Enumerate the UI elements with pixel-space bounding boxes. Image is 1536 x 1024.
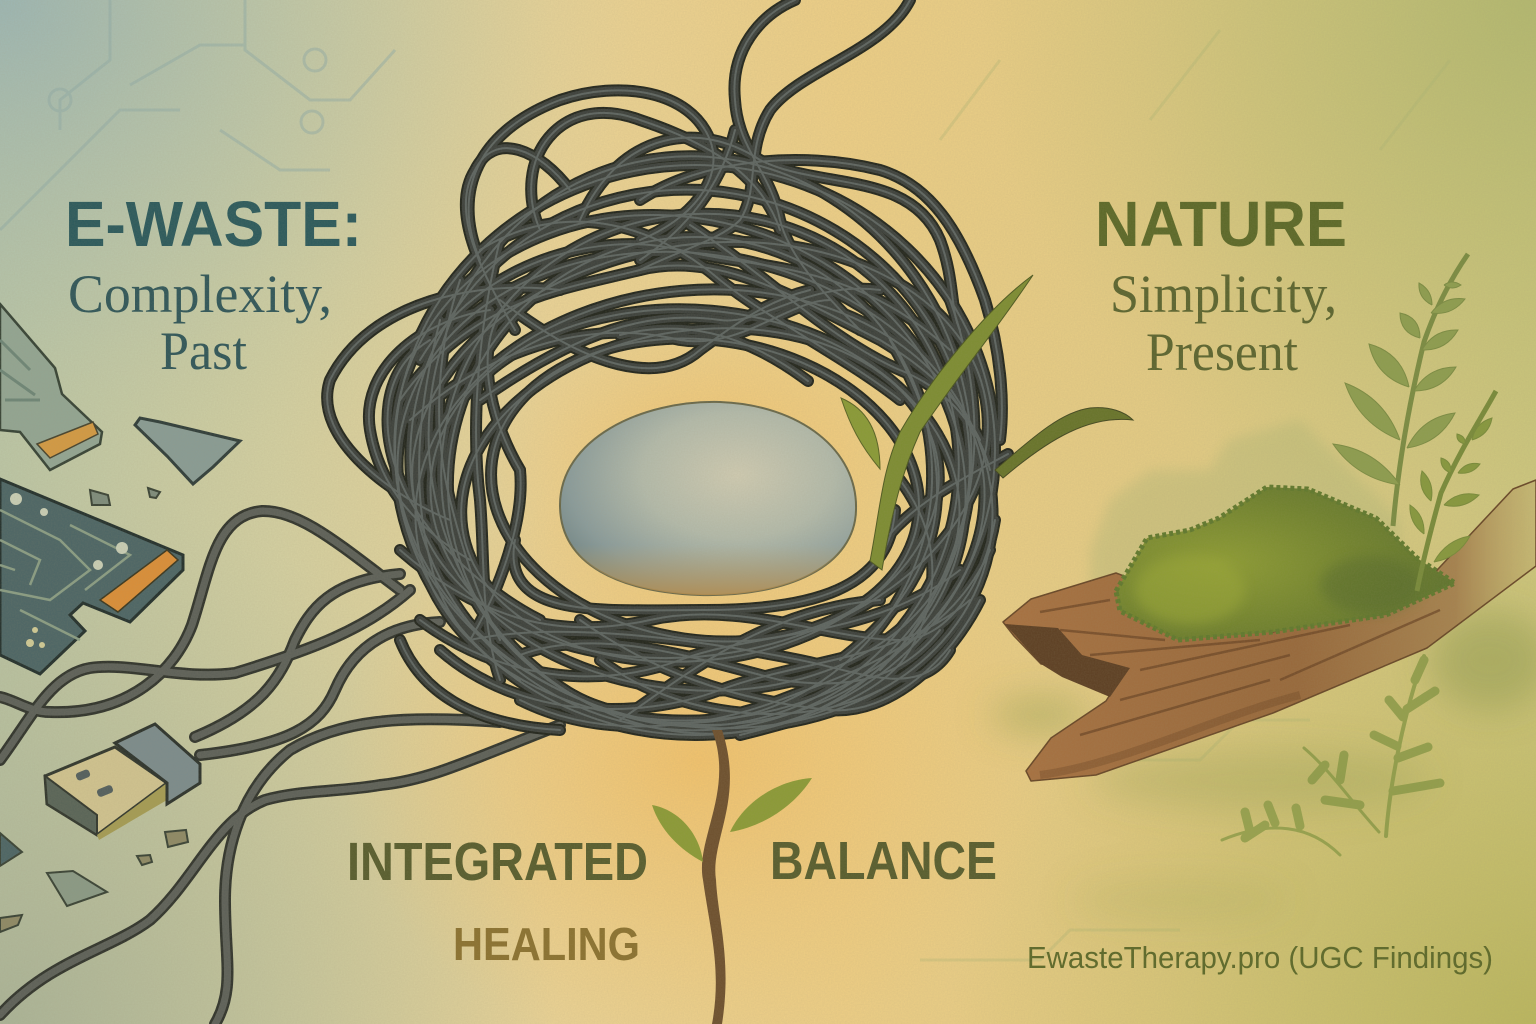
source credit: EwasteTherapy.pro (UGC Findings) xyxy=(1027,940,1493,975)
fern: upper right xyxy=(1410,391,1496,591)
ground grass xyxy=(990,610,1536,922)
moss xyxy=(1116,487,1455,640)
cables to nest xyxy=(0,511,560,1024)
heading: nature: Present xyxy=(1146,322,1298,382)
label: integrated: INTEGRATED xyxy=(347,832,648,892)
icon: usb plug xyxy=(45,724,200,840)
heading: nature xyxy=(1095,188,1347,382)
broken shard xyxy=(135,418,240,484)
small debris xyxy=(0,488,188,932)
driftwood log xyxy=(1003,480,1536,781)
fern: ground sprig xyxy=(1222,805,1340,855)
fern: upper left xyxy=(1333,254,1468,526)
circuit card fragment xyxy=(0,304,102,470)
fern: lower xyxy=(1304,656,1440,836)
panel: e-waste debris xyxy=(0,304,560,1024)
woven cable nest xyxy=(322,0,1053,822)
heading: e-waste: E-WASTE: xyxy=(65,188,362,260)
label: healing: HEALING xyxy=(453,918,640,970)
heading: nature: NATURE xyxy=(1095,188,1347,260)
panel: nature scene xyxy=(990,254,1536,922)
heading: nature: Simplicity, xyxy=(1110,264,1337,324)
label: balance: BALANCE xyxy=(770,831,997,891)
heading: e-waste: Past xyxy=(160,321,247,381)
background hills xyxy=(1090,420,1400,600)
sprout xyxy=(652,730,812,1024)
stone xyxy=(560,402,856,595)
heading: e-waste: Complexity, xyxy=(68,264,332,324)
heading: e-waste xyxy=(65,188,362,381)
circuit board xyxy=(0,479,183,674)
green shoot xyxy=(841,275,1133,570)
